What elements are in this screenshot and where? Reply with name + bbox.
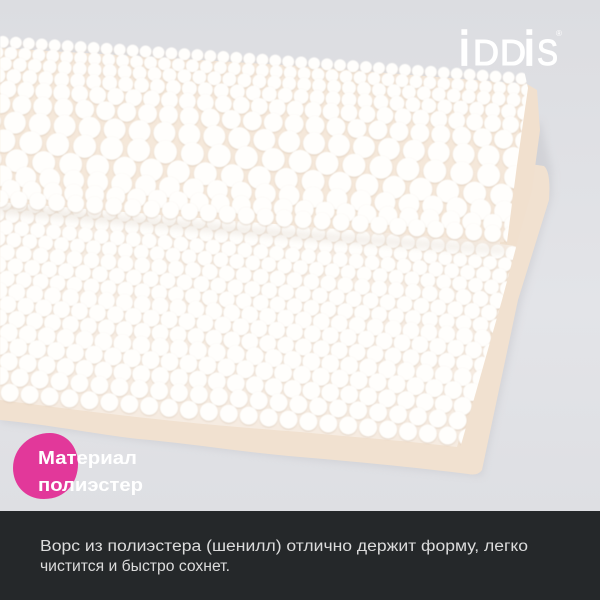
description text: Ворс из полиэстера (шенилл) отлично держит форму, легко xyxy=(40,538,528,555)
roll backing xyxy=(0,48,525,242)
roll pile rows xyxy=(0,41,540,237)
lower rug backing xyxy=(0,200,516,447)
logo: IDDIS: ® xyxy=(556,29,562,38)
rug shadow xyxy=(0,120,552,476)
logo: IDDIS: D xyxy=(500,32,526,73)
logo: IDDIS: S xyxy=(537,32,558,73)
rug xyxy=(0,41,552,476)
badge heading: Материал xyxy=(38,447,137,468)
logo: IDDIS: i xyxy=(524,23,535,76)
badge heading: полиэстер xyxy=(38,474,143,495)
roll border xyxy=(500,80,540,246)
badge heading xyxy=(38,447,143,495)
description text: чистится и быстро сохнет. xyxy=(40,558,230,575)
lower rug pile xyxy=(0,202,540,445)
pink blob badge xyxy=(13,433,78,499)
logo: IDDIS: D xyxy=(473,32,499,73)
logo: IDDIS: i xyxy=(459,23,470,76)
description text xyxy=(40,538,528,575)
logo: IDDIS xyxy=(459,23,562,76)
roll shadow xyxy=(0,206,505,252)
bottom dark bar xyxy=(0,511,600,600)
lower rug border xyxy=(0,164,549,474)
